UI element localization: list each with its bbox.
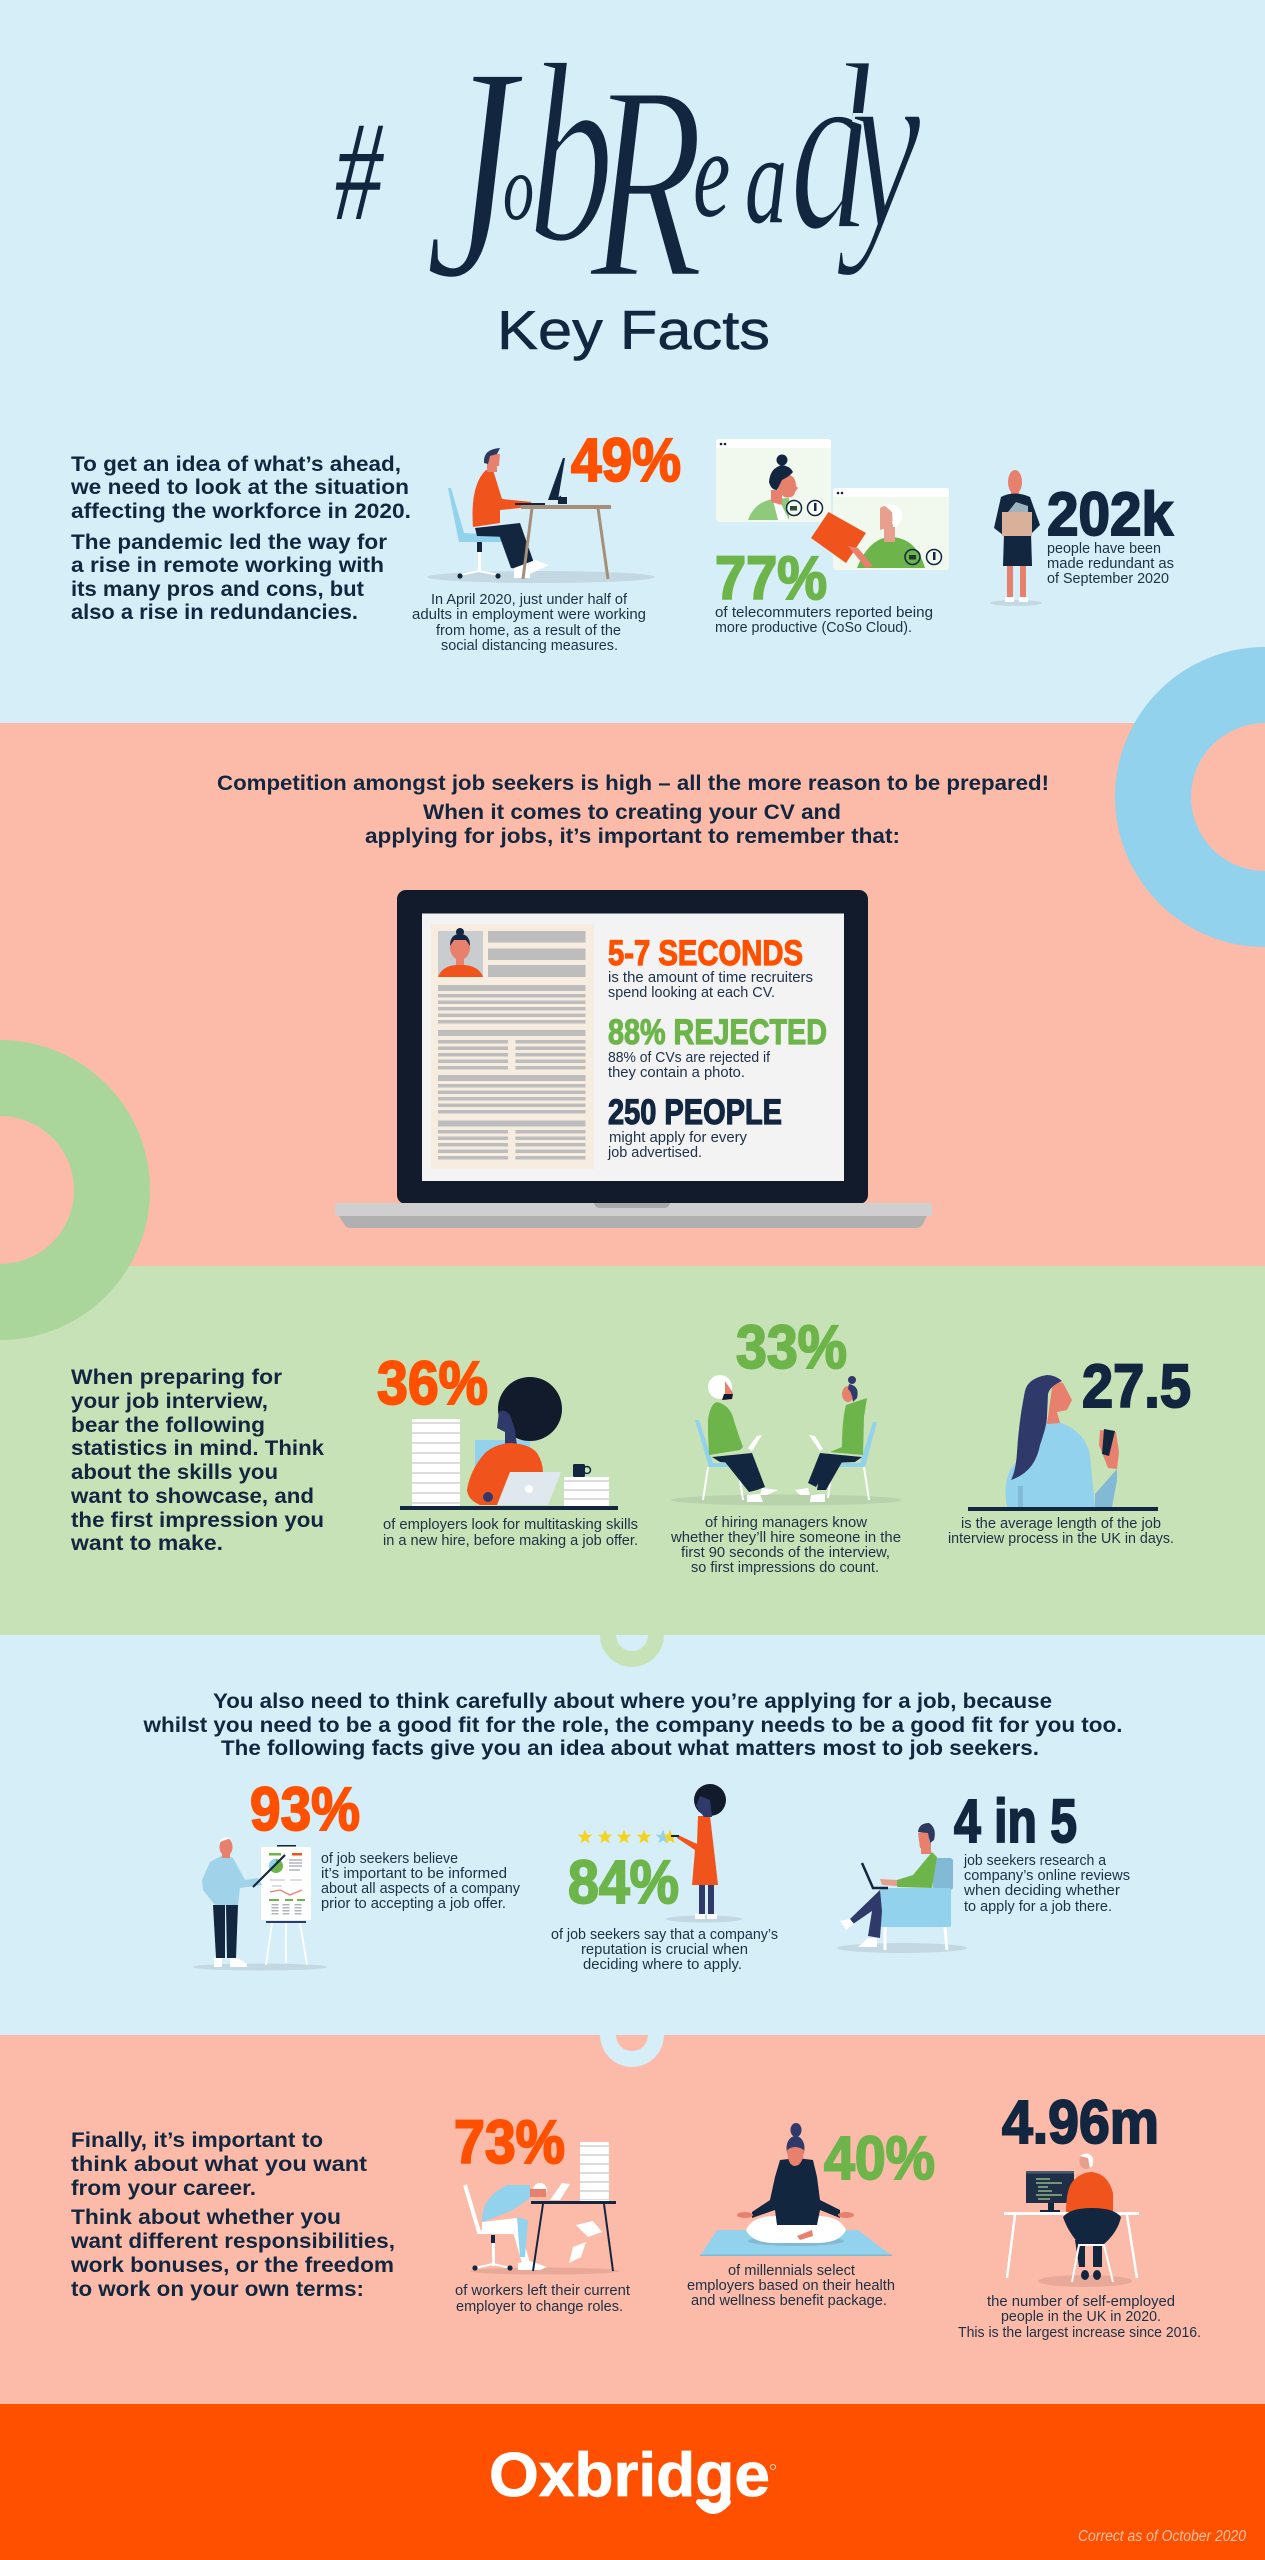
caption: 40%: of millennials select [728, 2263, 855, 2279]
footer band [0, 2404, 1265, 2560]
caption: 49%: In April 2020, just under half of [431, 592, 628, 608]
icon: exhausted worker at desk [465, 2142, 620, 2274]
stat: 4 in 5: 4 in 5 [954, 1787, 1077, 1855]
caption: 33%: so first impressions do count. [691, 1560, 879, 1576]
stat: 40%: 40% [824, 2124, 935, 2192]
intro text block: also a rise in redundancies. [71, 600, 358, 624]
caption: 77%: of telecommuters reported being [715, 605, 933, 621]
caption: 33%: whether they’ll hire someone in the [670, 1530, 901, 1546]
caption: 73%: employer to change roles. [456, 2299, 623, 2315]
title: #JobReady [335, 2, 921, 343]
caption: 202k: made redundant as [1047, 556, 1174, 572]
icon: five star rating with woman [578, 1784, 742, 1922]
caption: 49%: from home, as a result of the [436, 623, 621, 639]
caption: 49%: adults in employment were working [412, 607, 646, 623]
heading: When it comes to creating your CV and [423, 800, 841, 824]
decorative blue ring [1153, 685, 1265, 909]
caption: 27.5 [948, 1516, 1174, 1547]
caption: 84%: reputation is crucial when [581, 1942, 748, 1958]
caption: 4.96m: people in the UK in 2020. [1001, 2309, 1161, 2325]
heading: applying for jobs, it’s important to remember that: [365, 824, 900, 848]
caption: 40%: and wellness benefit package. [691, 2293, 887, 2309]
caption: 40% [687, 2263, 895, 2309]
intro text block [70, 452, 411, 624]
caption: 33%: first 90 seconds of the interview, [681, 1545, 890, 1561]
title: #JobReady: R [588, 29, 704, 337]
panel: where to apply [0, 1635, 1265, 2035]
stat: 88% rejected [608, 1013, 827, 1081]
caption: 36%: in a new hire, before making a job offer. [383, 1533, 638, 1549]
stat: 33%: 33% [736, 1313, 847, 1381]
interview text block: bear the following [71, 1413, 265, 1437]
icon: presenter with flip chart [193, 1838, 327, 1970]
stat: 250 people: 250 PEOPLE [608, 1093, 782, 1132]
caption: 36%: of employers look for multitasking skills [383, 1517, 638, 1533]
caption: 202k: people have been [1047, 541, 1161, 557]
caption: 49%: social distancing measures. [441, 638, 618, 654]
caption: 27.5: interview process in the UK in days. [948, 1531, 1174, 1547]
interview text block [70, 1365, 324, 1555]
title: #JobReady: y [836, 12, 921, 278]
icon: redundant person carrying box [990, 470, 1042, 606]
heading: Competition amongst job seekers is high – all the more reason to be prepared! [217, 771, 1049, 795]
icon: video call windows [716, 439, 949, 570]
icon: self-employed person at computer [1004, 2153, 1139, 2287]
caption: 4 in 5: job seekers research a [963, 1853, 1107, 1869]
caption: 4.96m [958, 2294, 1201, 2341]
caption: 77%: more productive (CoSo Cloud). [715, 620, 912, 636]
caption: 202k [1047, 541, 1174, 587]
interview text block: want to make. [70, 1531, 223, 1555]
interview text block: the first impression you [71, 1508, 324, 1532]
laptop with CV screen [335, 890, 932, 1228]
caption: 93% [321, 1851, 521, 1912]
stat: 250 people [607, 1093, 782, 1161]
panel: career wants [0, 2035, 1265, 2404]
career text block: work bonuses, or the freedom [70, 2253, 394, 2277]
caption: 202k: of September 2020 [1047, 571, 1169, 587]
title: #JobReady: # [335, 93, 384, 251]
CV document [431, 924, 594, 1169]
logo: Oxbridge: Oxbridge [489, 2441, 770, 2510]
caption: 84%: deciding where to apply. [583, 1957, 742, 1973]
heading: You also need to think carefully about where you’re applying for a job, because [213, 1689, 1052, 1713]
stat: 250 people: job advertised. [607, 1145, 702, 1161]
interview text block: want to showcase, and [70, 1484, 314, 1508]
career text block [70, 2128, 395, 2301]
icon: man with laptop in armchair [837, 1823, 967, 1953]
heading [217, 771, 1049, 848]
caption: 4 in 5 [963, 1853, 1130, 1915]
icon: woman checking phone [968, 1375, 1158, 1511]
caption: 73% [455, 2283, 630, 2315]
note: date correct: Correct as of October 2020 [1078, 2528, 1246, 2545]
intro text block: its many pros and cons, but [71, 577, 364, 601]
stat: 49%: 49% [571, 426, 681, 494]
caption: 36% [383, 1517, 638, 1549]
caption: 77% [715, 605, 933, 636]
stat: 73%: 73% [454, 2108, 565, 2176]
caption: 93%: it’s important to be informed [321, 1866, 507, 1882]
heading: The following facts give you an idea about what matters most to job seekers. [221, 1736, 1039, 1760]
title: #JobReady: e [693, 105, 730, 244]
title: #JobReady: J [425, 2, 524, 343]
stat: 36%: 36% [377, 1349, 488, 1417]
caption: 4.96m: This is the largest increase since 2016. [958, 2325, 1201, 2341]
caption: 4 in 5: when deciding whether [963, 1883, 1120, 1899]
stat: 5-7 seconds [608, 934, 813, 1001]
stat: 27.5: 27.5 [1082, 1352, 1191, 1420]
stat: 84%: 84% [568, 1848, 679, 1916]
interview text block: statistics in mind. Think [71, 1436, 324, 1460]
caption: 4 in 5: company’s online reviews [964, 1868, 1130, 1884]
heading: whilst you need to be a good fit for the role, the company needs to be a good fit for you too. [142, 1713, 1122, 1737]
interview text block: about the skills you [71, 1460, 278, 1484]
intro text block: we need to look at the situation [70, 475, 409, 499]
panel: key facts header and 2020 situation [0, 0, 1265, 723]
stat: 250 people: might apply for every [609, 1130, 748, 1146]
career text block: think about what you want [71, 2152, 367, 2176]
caption: 40%: employers based on their health [687, 2278, 895, 2294]
title: #JobReady: d [790, 15, 871, 281]
title: #JobReady: b [528, 12, 614, 296]
intro text block: a rise in remote working with [71, 553, 384, 577]
stat: 88% rejected: they contain a photo. [608, 1065, 745, 1081]
stat: 4.96m: 4.96m [1002, 2088, 1159, 2156]
icon: person meditating on mat [700, 2123, 892, 2256]
stat: 93%: 93% [250, 1775, 360, 1843]
caption: 33%: of hiring managers know [705, 1515, 868, 1531]
stat: 77%: 77% [715, 544, 827, 612]
interview text block: When preparing for [71, 1365, 283, 1389]
panel: CV facts [0, 685, 1265, 1266]
career text block: Finally, it’s important to [71, 2128, 323, 2152]
decorative blue half ring [600, 2035, 664, 2067]
caption: 93%: about all aspects of a company [321, 1881, 521, 1897]
icon: interviewer and candidate seated [671, 1375, 901, 1506]
caption: 27.5: is the average length of the job [961, 1516, 1161, 1532]
caption: 33% [670, 1515, 901, 1576]
career text block: Think about whether you [71, 2205, 341, 2229]
career text block: to work on your own terms: [71, 2277, 364, 2301]
caption: 4 in 5: to apply for a job there. [964, 1899, 1112, 1915]
decorative green half ring [600, 1635, 664, 1667]
heading [142, 1689, 1122, 1760]
stat: 5-7 seconds: spend looking at each CV. [608, 985, 775, 1001]
interview text block: your job interview, [71, 1389, 268, 1413]
caption: 84% [551, 1927, 778, 1973]
career text block: want different responsibilities, [70, 2229, 395, 2253]
icon: person working from home at desk [427, 448, 655, 583]
title: #JobReady: a [745, 111, 787, 250]
intro text block: The pandemic led the way for [71, 530, 388, 554]
stat: 5-7 seconds: 5-7 SECONDS [608, 934, 803, 973]
decorative green ring [0, 1078, 112, 1302]
stat: 88% rejected: 88% of CVs are rejected if [608, 1050, 771, 1066]
panel: job interview [0, 1078, 1265, 1635]
stat: 88% rejected: 88% REJECTED [608, 1013, 827, 1052]
caption: 84%: of job seekers say that a company’s [551, 1927, 778, 1943]
stat: 202k: 202k [1047, 480, 1173, 548]
icon: multitasking employee at desk [400, 1377, 618, 1510]
caption: 49% [412, 592, 646, 654]
caption: 73%: of workers left their current [455, 2283, 630, 2299]
intro text block: affecting the workforce in 2020. [71, 499, 411, 523]
subtitle: Key Facts: Key Facts [497, 299, 770, 361]
stat: 5-7 seconds: is the amount of time recruiters [608, 970, 813, 986]
caption: 93%: prior to accepting a job offer. [321, 1896, 506, 1912]
title: #JobReady: o [503, 138, 534, 240]
career text block: from your career. [71, 2176, 256, 2200]
intro text block: To get an idea of what’s ahead, [71, 452, 401, 476]
caption: 93%: of job seekers believe [321, 1851, 458, 1867]
caption: 4.96m: the number of self-employed [987, 2294, 1175, 2310]
